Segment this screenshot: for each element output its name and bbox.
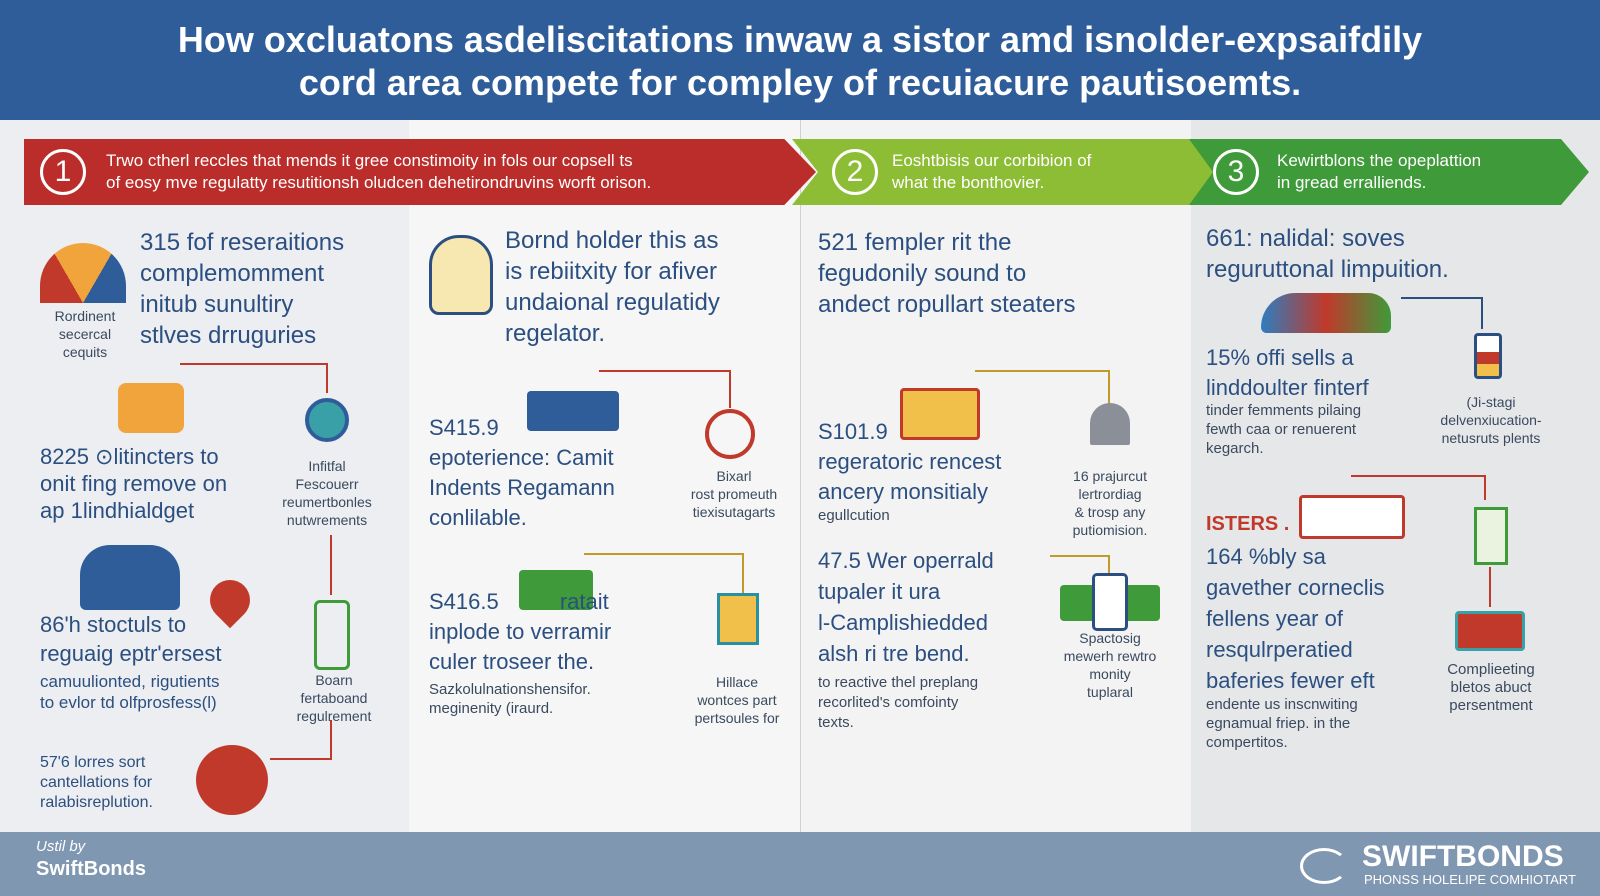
text: 47.5: l-Camplishiedded bbox=[818, 610, 988, 635]
logo: PHONSS HOLELIPE COMHIOTART bbox=[1364, 872, 1576, 887]
text: S101.9 bbox=[818, 419, 1002, 504]
text: 164: 164 %bly sa bbox=[1206, 544, 1326, 569]
text: 47.5 bbox=[818, 548, 994, 666]
text: 164: baferies fewer eft bbox=[1206, 668, 1375, 693]
icon: tower bbox=[1474, 507, 1508, 565]
label: Spactosig bbox=[1079, 630, 1141, 646]
label bbox=[1073, 468, 1147, 538]
title bbox=[178, 19, 1422, 103]
text: S415.9: epoterience: Camit bbox=[429, 445, 614, 470]
label bbox=[691, 468, 777, 520]
label bbox=[55, 308, 116, 360]
icon: badge bbox=[305, 398, 349, 442]
text: bond holder: regelator. bbox=[505, 320, 605, 347]
text: bond holder bbox=[505, 227, 720, 347]
step 1: Trwo ctherl reccles that mends it gree constimoity in fols our copsell ts bbox=[106, 151, 633, 170]
header bbox=[0, 0, 1600, 120]
label: pertsoules for bbox=[695, 710, 779, 726]
text: S101.9: S101.9 bbox=[818, 419, 888, 444]
step 1: of eosy mve regulatty resutitionsh oludcen dehetirondruvins worft orison. bbox=[106, 173, 651, 192]
text: 521 bbox=[818, 229, 1075, 318]
icon: doc bbox=[717, 593, 759, 645]
text: bond holder: undaional regulatidy bbox=[505, 289, 720, 316]
label bbox=[695, 674, 780, 726]
text: 164: fellens year of bbox=[1206, 606, 1343, 631]
panel: column 4: compertitos. bbox=[1206, 734, 1288, 751]
text: 521: andect ropullart steaters bbox=[818, 291, 1075, 318]
step 3: 3 bbox=[1228, 155, 1244, 188]
text: 8225: 8225 ⊙litincters to bbox=[40, 444, 219, 469]
icon: red circle bbox=[705, 409, 755, 459]
text: 315: stlves drruguries bbox=[140, 322, 316, 349]
step 3: Kewirtblons the opeplattion bbox=[1277, 151, 1481, 170]
footer bbox=[0, 832, 1600, 896]
text: 57: 57'6 lorres sort bbox=[40, 754, 145, 771]
label: delvenxiucation- bbox=[1440, 412, 1542, 428]
text: 15% bbox=[1206, 345, 1369, 400]
icon: truck bbox=[527, 391, 619, 431]
panel: column 4: endente us inscnwiting bbox=[1206, 696, 1358, 713]
icon: truck bbox=[1299, 495, 1405, 539]
panel: column 2: Sazkolulnationshensifor. bbox=[429, 681, 591, 698]
title: How oxcluatons asdeliscitations inwaw a sistor amd isnolder-expsaifdily bbox=[178, 19, 1422, 60]
icon: lamp bbox=[314, 600, 350, 670]
label: Rordinent bbox=[55, 308, 115, 324]
text: 661: reguruttonal limpuition. bbox=[1206, 256, 1449, 283]
text: 315: 315 fof reseraitions bbox=[140, 229, 344, 256]
text: bond holder: is rebiitxity for afiver bbox=[505, 258, 717, 285]
panel: column 4: egnamual friep. in the bbox=[1206, 715, 1350, 732]
logo: SWIFTBONDS bbox=[1362, 840, 1564, 873]
panel: column 3 bbox=[818, 229, 1160, 731]
label: mewerh rewtro bbox=[1064, 648, 1156, 664]
label bbox=[1447, 661, 1535, 714]
text: 47.5: 47.5 Wer operrald bbox=[818, 548, 994, 573]
panel: column 2 bbox=[429, 227, 780, 726]
panel: column 3: egullcution bbox=[818, 507, 890, 524]
panel: column 1 bbox=[40, 229, 372, 815]
text: S415.9: conlilable. bbox=[429, 505, 527, 530]
icon: cart bbox=[900, 388, 980, 440]
panel: column 4: fewth caa or renuerent bbox=[1206, 421, 1356, 438]
icon: machine bbox=[1455, 611, 1525, 651]
panel: column 4: kegarch. bbox=[1206, 440, 1264, 457]
label: wontces part bbox=[697, 692, 777, 708]
step 2: 2 bbox=[847, 155, 863, 188]
icon: courthouse bbox=[1090, 403, 1130, 445]
text: 8225: ap 1lindhialdget bbox=[40, 498, 194, 523]
label: 16 prajurcut bbox=[1073, 468, 1147, 484]
step 3: in gread erralliends. bbox=[1277, 173, 1426, 192]
step 2: Eoshtbisis our corbibion of bbox=[892, 151, 1091, 170]
banner: steps bbox=[24, 139, 1589, 205]
label: Boarn bbox=[315, 672, 353, 688]
text: 315: complemomment bbox=[140, 260, 324, 287]
label: persentment bbox=[1449, 697, 1533, 714]
icon: truck green bbox=[519, 570, 593, 610]
text: 57: ralabisreplution. bbox=[40, 794, 153, 811]
label: reumertbonles bbox=[282, 494, 372, 510]
icon: gauge bbox=[40, 243, 126, 303]
icon: phone bbox=[1060, 585, 1160, 621]
column backgrounds bbox=[0, 120, 1191, 832]
text: 47.5: alsh ri tre bend. bbox=[818, 641, 970, 666]
label bbox=[282, 458, 372, 528]
step 2: what the bonthovier. bbox=[892, 173, 1044, 192]
icon: battery bbox=[1474, 333, 1502, 379]
label: monity bbox=[1089, 666, 1131, 682]
panel: column 4: tinder femments pilaing bbox=[1206, 402, 1361, 419]
label: fertaboand bbox=[301, 690, 367, 706]
text: 661: 661: nalidal: soves bbox=[1206, 225, 1405, 252]
logo bbox=[1300, 840, 1576, 887]
panel: column 1: camuulionted, rigutients bbox=[40, 672, 220, 691]
text: S101.9: ancery monsitialy bbox=[818, 479, 988, 504]
text: 57 bbox=[40, 754, 153, 811]
text: S416.5: S416.5 ratait bbox=[429, 589, 609, 614]
text: S416.5: inplode to verramir bbox=[429, 619, 611, 644]
label: Complieeting bbox=[1447, 661, 1535, 678]
title: cord area compete for compley of recuiacure pautisoemts. bbox=[299, 62, 1301, 103]
text: 86: 86'h stoctuls to bbox=[40, 612, 186, 637]
panel: column 2: meginenity (iraurd. bbox=[429, 700, 553, 717]
text: 86 bbox=[40, 612, 222, 666]
label: Bixarl bbox=[716, 468, 752, 484]
label: Fescouerr bbox=[295, 476, 359, 492]
label bbox=[1064, 630, 1156, 700]
panel: column 3: to reactive thel preplang bbox=[818, 674, 978, 691]
text: S416.5: culer troseer the. bbox=[429, 649, 594, 674]
text: 47.5: tupaler it ura bbox=[818, 579, 940, 604]
text: 15%: linddoulter finterf bbox=[1206, 375, 1369, 400]
text: 315: initub sunultiry bbox=[140, 291, 293, 318]
text: 164: resqulrperatied bbox=[1206, 637, 1353, 662]
footer: SwiftBonds bbox=[36, 858, 146, 880]
text: 15%: 15% offi sells a bbox=[1206, 345, 1354, 370]
panel: column 3: recorlited's comfointy bbox=[818, 694, 958, 711]
text: 164: gavether corneclis bbox=[1206, 575, 1385, 600]
text: 8225 bbox=[40, 444, 227, 523]
label: cequits bbox=[63, 344, 107, 360]
panel: column 3: texts. bbox=[818, 714, 854, 731]
label: Hillace bbox=[716, 674, 758, 690]
label bbox=[297, 672, 372, 724]
label: bletos abuct bbox=[1451, 679, 1531, 696]
text: S415.9: Indents Regamann bbox=[429, 475, 615, 500]
label: lertrordiag bbox=[1078, 486, 1142, 502]
label: nutwrements bbox=[287, 512, 367, 528]
step 3 bbox=[1189, 139, 1589, 205]
icon: helmet bbox=[429, 235, 493, 315]
text: S415.9: S415.9 bbox=[429, 415, 499, 440]
label: & trosp any bbox=[1075, 504, 1145, 520]
text: 521: 521 fempler rit the bbox=[818, 229, 1011, 256]
label: netusruts plents bbox=[1442, 430, 1540, 446]
label: (Ji-stagi bbox=[1466, 394, 1516, 410]
text: 8225: onit fing remove on bbox=[40, 471, 227, 496]
text: 57: cantellations for bbox=[40, 774, 152, 791]
label: rost promeuth bbox=[691, 486, 777, 502]
icon: apple book bbox=[196, 745, 268, 815]
label bbox=[1440, 394, 1542, 446]
step 1 bbox=[24, 139, 816, 205]
credit: Ustil by bbox=[36, 838, 85, 855]
icon: building bbox=[118, 383, 184, 433]
label: regulrement bbox=[297, 708, 371, 724]
text: S415.9 bbox=[429, 415, 615, 530]
text: 521: fegudonily sound to bbox=[818, 260, 1026, 287]
label: Infitfal bbox=[308, 458, 346, 474]
panel: column 4 bbox=[1206, 225, 1542, 751]
label: putiomision. bbox=[1073, 522, 1147, 538]
icon: person bbox=[80, 545, 180, 610]
label: tiexisutagarts bbox=[693, 504, 775, 520]
text: 315 bbox=[140, 229, 344, 349]
text: bond holder: Bornd holder this as bbox=[505, 227, 718, 254]
step 1: 1 bbox=[55, 155, 71, 188]
label: secercal bbox=[59, 326, 111, 342]
icon: wave bbox=[1261, 293, 1391, 333]
text: S416.5 bbox=[429, 589, 611, 674]
text: S101.9: regeratoric rencest bbox=[818, 449, 1001, 474]
step 2 bbox=[792, 139, 1226, 205]
text: ISTERS: ISTERS . bbox=[1206, 513, 1289, 535]
panel: column 1: to evlor td olfprosfess(l) bbox=[40, 693, 217, 712]
text: 86: reguaig eptr'ersest bbox=[40, 641, 222, 666]
text: 164 bbox=[1206, 544, 1385, 693]
label: tuplaral bbox=[1087, 684, 1133, 700]
text: 661 bbox=[1206, 225, 1449, 283]
